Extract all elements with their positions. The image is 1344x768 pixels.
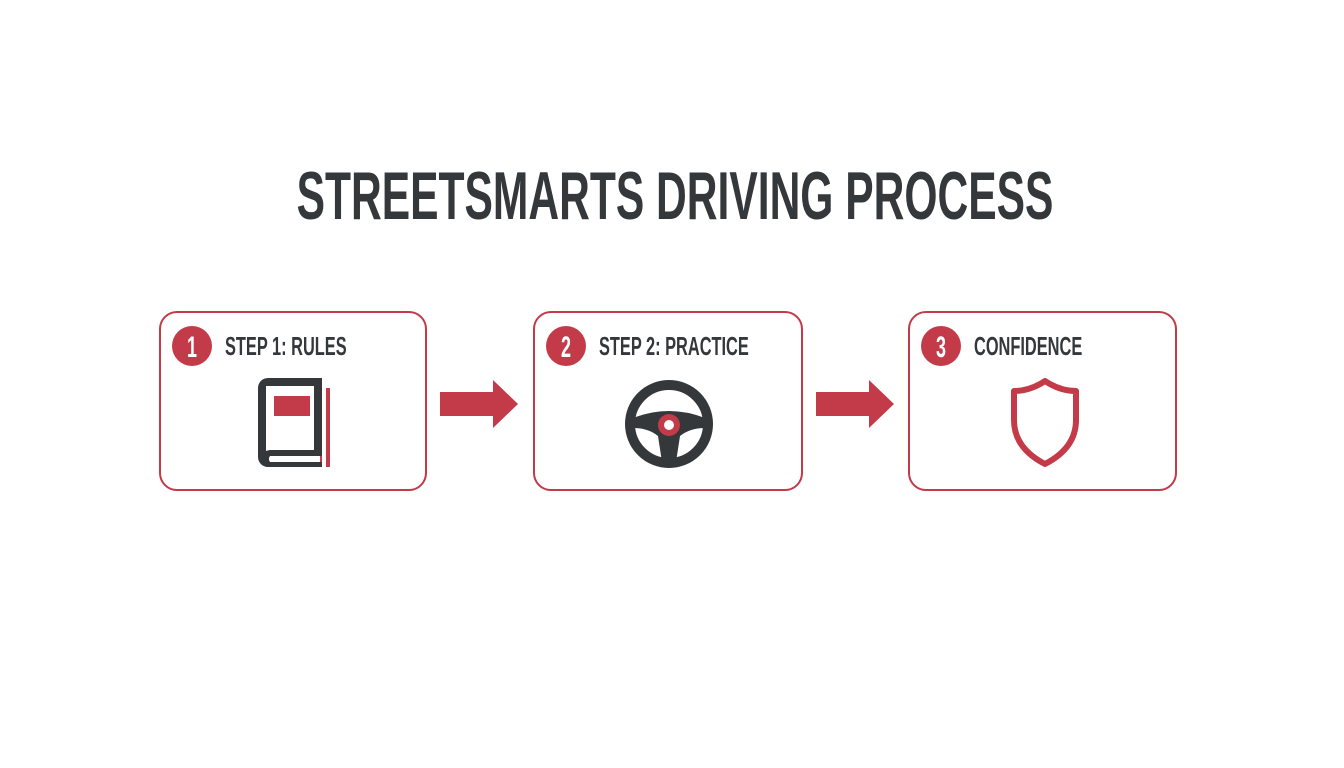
arrow 1	[440, 380, 518, 428]
panel: step 1 rules	[160, 312, 426, 490]
badge 3: 3	[936, 332, 946, 364]
icon: steering wheel	[630, 385, 708, 463]
panel: confidence	[909, 312, 1176, 490]
panel: step 2 practice	[534, 312, 802, 490]
badge 1	[172, 326, 212, 366]
heading: confidence: CONFIDENCE	[974, 331, 1082, 361]
badge 1: 1	[187, 332, 197, 364]
badge 3	[921, 326, 961, 366]
badge 2: 2	[561, 332, 571, 364]
arrow 2	[816, 380, 894, 428]
icon: book	[258, 378, 330, 467]
title: STREETSMARTS DRIVING PROCESS	[297, 159, 1053, 235]
badge 2	[546, 326, 586, 366]
heading: step 2: STEP 2: PRACTICE	[599, 331, 749, 361]
heading: step 1: STEP 1: RULES	[225, 331, 347, 361]
icon: shield	[1014, 381, 1076, 464]
